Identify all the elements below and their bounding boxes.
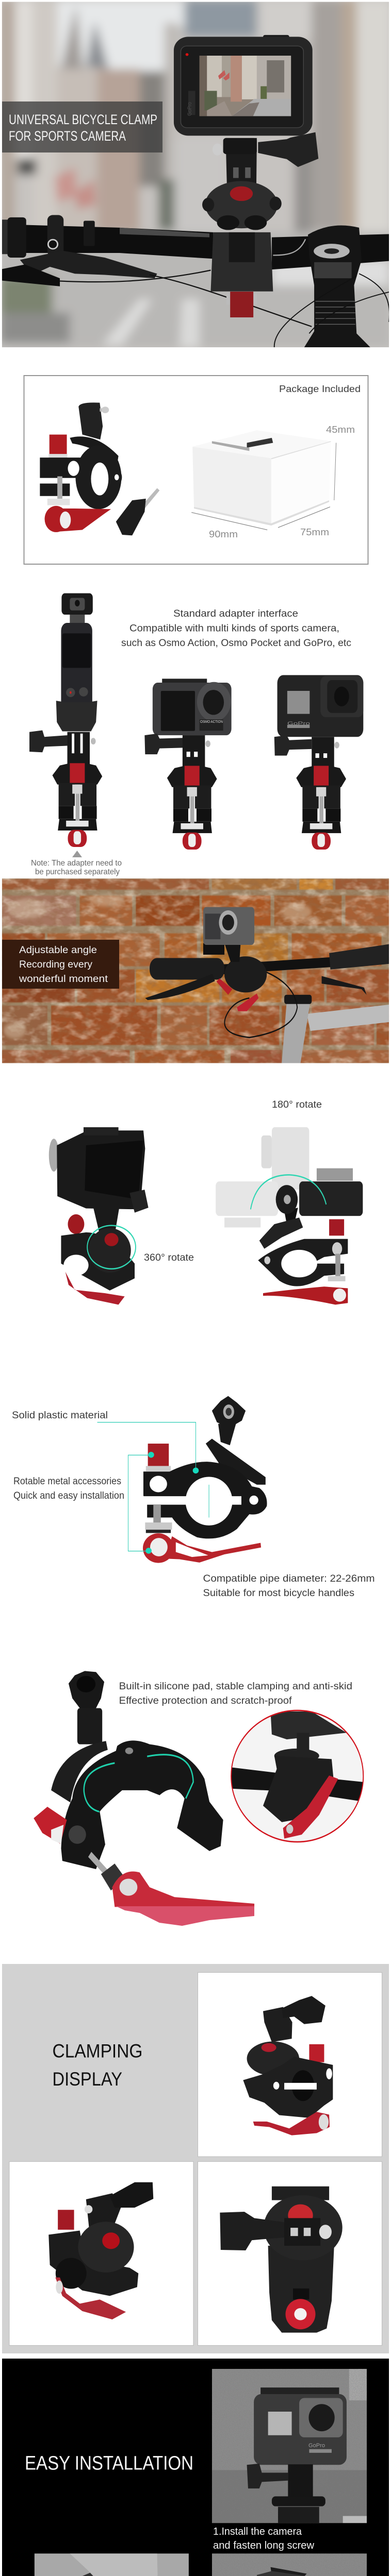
card: clamp angled xyxy=(48,2182,153,2319)
blurred street background xyxy=(0,0,391,347)
dimension arrows xyxy=(191,443,336,530)
caption: step 1 xyxy=(213,2526,315,2551)
lever tip xyxy=(116,1906,254,1926)
silicone pad text: Built-in silicone pad, stable clamping and anti-skid xyxy=(119,1681,352,1692)
adapter note: Note: The adapter need to xyxy=(31,859,122,868)
title banner: FOR SPORTS CAMERA xyxy=(9,128,126,144)
step 1 camera logo: GoPro xyxy=(308,2443,325,2449)
caption banner: wonderful moment xyxy=(19,974,108,985)
heading: package included: Package Included xyxy=(279,384,361,394)
brake lever xyxy=(20,251,157,278)
title banner xyxy=(2,101,162,152)
panel: easy installation xyxy=(2,2359,389,2576)
silicone pad text: Effective protection and scratch-proof xyxy=(119,1696,292,1706)
photo: step 1 xyxy=(212,2369,367,2523)
brick mottling xyxy=(2,878,389,1063)
caption banner: Adjustable angle xyxy=(19,945,97,956)
label: pipe diameter: Compatible pipe diameter: 22-26mm xyxy=(203,1573,374,1584)
panel: clamping display xyxy=(2,1964,389,2353)
callout dots xyxy=(145,1452,199,1554)
long screw xyxy=(116,488,159,535)
panel: rotation demos xyxy=(49,1099,363,1304)
caption: step 1: 1.Install the camera xyxy=(213,2526,302,2537)
gopro on clamp xyxy=(274,675,363,850)
white package box xyxy=(192,430,331,526)
panel: hero photo xyxy=(0,0,391,347)
180 degree clamp xyxy=(216,1127,363,1304)
label: 180 rotate: 180° rotate xyxy=(272,1099,322,1110)
handlebar right xyxy=(272,234,389,269)
label: rotable metal: Quick and easy installation xyxy=(13,1490,124,1501)
clamp side view xyxy=(143,1396,267,1563)
inset detail circle xyxy=(231,1710,364,1842)
compatibility text xyxy=(121,608,351,649)
card frames xyxy=(198,1972,382,2157)
panel: brick wall photo xyxy=(2,878,389,1063)
heading: clamping display: CLAMPING xyxy=(53,2040,142,2062)
compatibility text: Compatible with multi kinds of sports camera, xyxy=(129,623,339,634)
caption banner: Recording every xyxy=(19,959,93,970)
swivel arm and screw xyxy=(225,138,257,187)
camera preview screen xyxy=(200,56,291,116)
silicone pad text xyxy=(119,1681,352,1706)
handlebar left xyxy=(2,224,213,259)
label: height: 45mm xyxy=(326,425,355,435)
compatibility text: Standard adapter interface xyxy=(173,608,298,619)
gopro camera xyxy=(263,35,289,37)
note arrow xyxy=(72,851,82,857)
label: length: 90mm xyxy=(209,529,238,539)
callout lines xyxy=(97,1422,209,1551)
camera marking: gopro: GoPro xyxy=(287,721,310,726)
bike handlebar xyxy=(145,907,389,1063)
title banner: UNIVERSAL BICYCLE CLAMP xyxy=(9,112,157,127)
heading: easy installation: EASY INSTALLATION xyxy=(25,2452,193,2474)
360 degree clamp xyxy=(49,1127,149,1304)
label: width: 75mm xyxy=(300,527,329,537)
osmo action on clamp xyxy=(144,679,232,850)
clamp product shot xyxy=(40,402,122,532)
label: pipe diameter xyxy=(203,1573,374,1599)
stem xyxy=(304,225,370,347)
panel: compatible cameras xyxy=(29,594,363,876)
open clamp xyxy=(34,1671,254,1907)
card: clamp back xyxy=(220,2187,343,2333)
adapter note xyxy=(31,859,122,876)
label: rotable metal xyxy=(13,1476,124,1501)
caption: step 1: and fasten long screw xyxy=(213,2540,315,2551)
photo: step 3 xyxy=(212,2553,367,2576)
panel: material callouts xyxy=(12,1396,374,1599)
panel: silicone pad xyxy=(34,1671,364,1926)
compatibility text: such as Osmo Action, Osmo Pocket and GoPro, etc xyxy=(121,638,351,649)
photo: step 2 xyxy=(35,2553,189,2576)
camera marking: osmo action: OSMO ACTION xyxy=(200,720,223,724)
camera logo: GoPro xyxy=(187,102,193,116)
adapter note: be purchased separately xyxy=(35,868,120,876)
label: rotable metal: Rotable metal accessories xyxy=(13,1476,121,1487)
osmo pocket on clamp xyxy=(29,594,102,847)
label: pipe diameter: Suitable for most bicycle handles xyxy=(203,1588,354,1599)
panel: package included xyxy=(24,376,368,564)
dial and clamp xyxy=(210,232,273,292)
heading: clamping display: DISPLAY xyxy=(53,2069,122,2090)
label: solid plastic: Solid plastic material xyxy=(12,1410,108,1421)
heading: clamping display xyxy=(53,2040,142,2090)
label: 360 rotate: 360° rotate xyxy=(144,1252,194,1263)
caption banner xyxy=(2,940,119,989)
card: clamp front xyxy=(243,1996,333,2136)
